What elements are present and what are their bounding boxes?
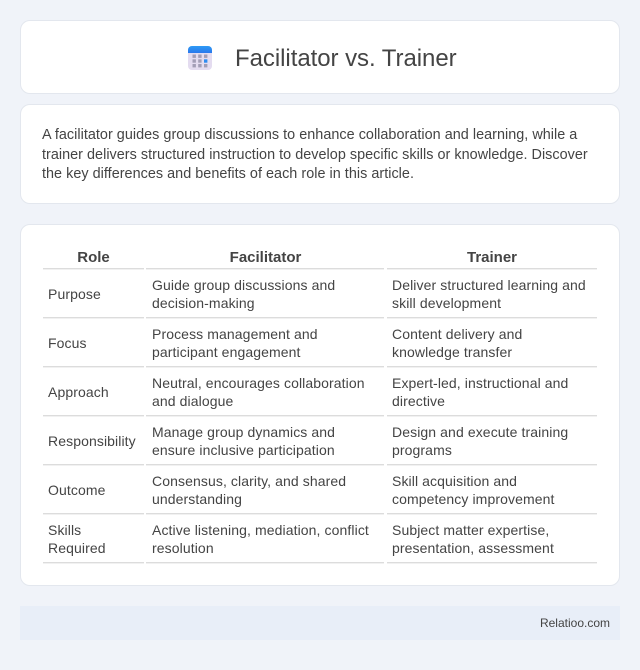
row: purpose: Purpose [48, 286, 101, 302]
table header: role: Role [77, 249, 110, 266]
row: responsibility: Responsibility [48, 433, 136, 449]
row: responsibility [48, 424, 568, 458]
row: focus: Focus [48, 335, 87, 351]
table header: trainer: Trainer [467, 249, 517, 266]
footer bar [20, 606, 620, 640]
row: responsibility: programs [392, 442, 452, 458]
row: purpose [48, 277, 586, 311]
row: skills required: Subject matter expertise, [392, 522, 549, 538]
icon: calendar [188, 46, 212, 70]
row: focus: Content delivery and [392, 326, 522, 342]
row: skills required [48, 522, 554, 556]
row: outcome: Skill acquisition and [392, 473, 517, 489]
row: responsibility: Design and execute training [392, 424, 568, 440]
footer credit: Relatioo.com [540, 616, 610, 630]
row: approach: Expert-led, instructional and [392, 375, 568, 391]
row: approach [48, 375, 568, 409]
panel: comparison table card [20, 224, 620, 586]
intro text: the key differences and benefits of each role in this article. [42, 166, 414, 182]
row: approach: Approach [48, 384, 109, 400]
panel: title card [20, 20, 620, 94]
row: approach: and dialogue [152, 393, 233, 409]
row: outcome: Consensus, clarity, and shared [152, 473, 346, 489]
row: outcome: Outcome [48, 482, 106, 498]
title: Facilitator vs. Trainer [235, 45, 457, 72]
row: focus: Process management and [152, 326, 318, 342]
row: purpose: skill development [392, 295, 501, 311]
intro text: trainer delivers structured instruction to develop specific skills or knowledge. Discover [42, 147, 588, 163]
row: focus [48, 326, 522, 360]
table header: facilitator: Facilitator [230, 249, 301, 266]
row: skills required: presentation, assessment [392, 540, 554, 556]
panel: intro card [20, 104, 620, 204]
intro text: A facilitator guides group discussions to enhance collaboration and learning, while a [42, 127, 577, 143]
row: skills required: Required [48, 540, 106, 556]
intro text [42, 127, 588, 182]
row: responsibility: Manage group dynamics and [152, 424, 335, 440]
row: skills required: Skills [48, 522, 81, 538]
row: outcome: understanding [152, 491, 242, 507]
row: skills required: Active listening, mediation, conflict [152, 522, 369, 538]
row: outcome: competency improvement [392, 491, 554, 507]
row: responsibility: ensure inclusive participation [152, 442, 335, 458]
row: focus: knowledge transfer [392, 344, 512, 360]
row: purpose: Guide group discussions and [152, 277, 335, 293]
row: outcome [48, 473, 554, 507]
row: approach: Neutral, encourages collaboration [152, 375, 365, 391]
row: skills required: resolution [152, 540, 214, 556]
row: purpose: decision-making [152, 295, 255, 311]
row: approach: directive [392, 393, 445, 409]
row: focus: participant engagement [152, 344, 301, 360]
comparison table [43, 268, 597, 564]
row: purpose: Deliver structured learning and [392, 277, 586, 293]
